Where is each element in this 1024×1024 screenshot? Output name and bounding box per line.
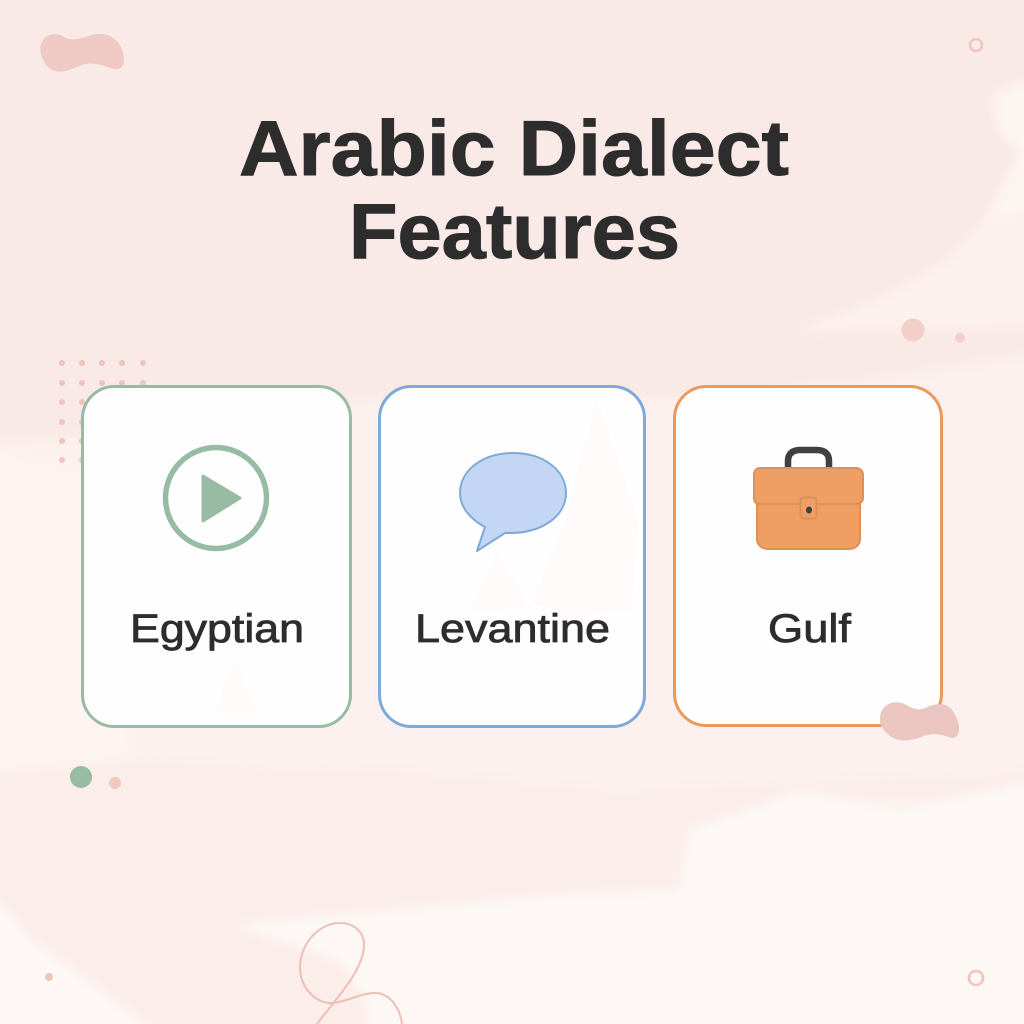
icon: briefcase xyxy=(754,450,863,549)
squiggle line xyxy=(300,923,402,1024)
label: Gulf: Gulf xyxy=(768,607,852,651)
dot grid pattern xyxy=(59,360,146,463)
title: Arabic Dialect xyxy=(239,104,789,192)
dot: green xyxy=(70,766,92,788)
dot: pink xyxy=(109,777,121,789)
faint tree watermark xyxy=(214,660,256,712)
ring: top right xyxy=(970,39,982,51)
dot: bottom left xyxy=(45,973,53,981)
ring: bottom right xyxy=(969,971,983,985)
title xyxy=(239,104,789,275)
dot: large right xyxy=(902,318,924,342)
panel: Levantine xyxy=(380,386,644,726)
decorative blob: card corner xyxy=(880,702,959,741)
faint tree watermark xyxy=(470,398,638,620)
decorative blob: top left xyxy=(40,34,124,72)
dot: small right xyxy=(955,333,965,343)
label: Egyptian: Egyptian xyxy=(130,607,304,651)
icon: speech bubble xyxy=(460,453,566,551)
icon: play button xyxy=(166,448,266,548)
panel: Egyptian xyxy=(82,386,350,726)
panel: Gulf xyxy=(674,386,942,726)
label: Levantine: Levantine xyxy=(415,607,610,651)
title: Features xyxy=(349,187,680,275)
